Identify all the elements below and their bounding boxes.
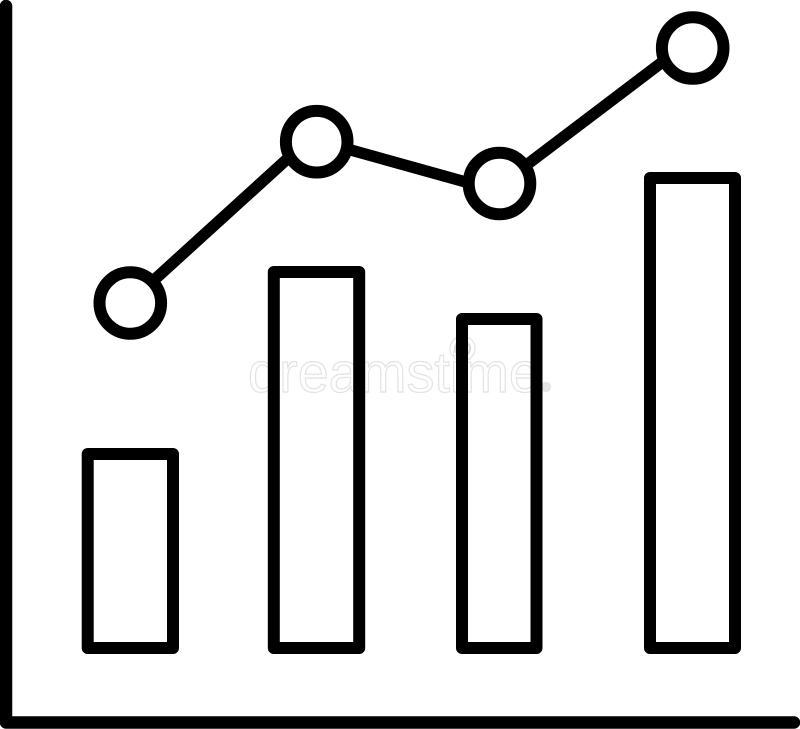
watermark: dreamstime <box>248 341 540 405</box>
trend line <box>150 56 670 284</box>
data point 3 <box>469 153 530 214</box>
bar 2 <box>274 272 359 648</box>
data point 1 <box>100 272 161 334</box>
data point 2 <box>286 111 348 172</box>
bar 4 <box>650 178 735 648</box>
data point 4 <box>662 17 724 79</box>
bar 1 <box>88 454 173 648</box>
bar 3 <box>462 319 536 648</box>
